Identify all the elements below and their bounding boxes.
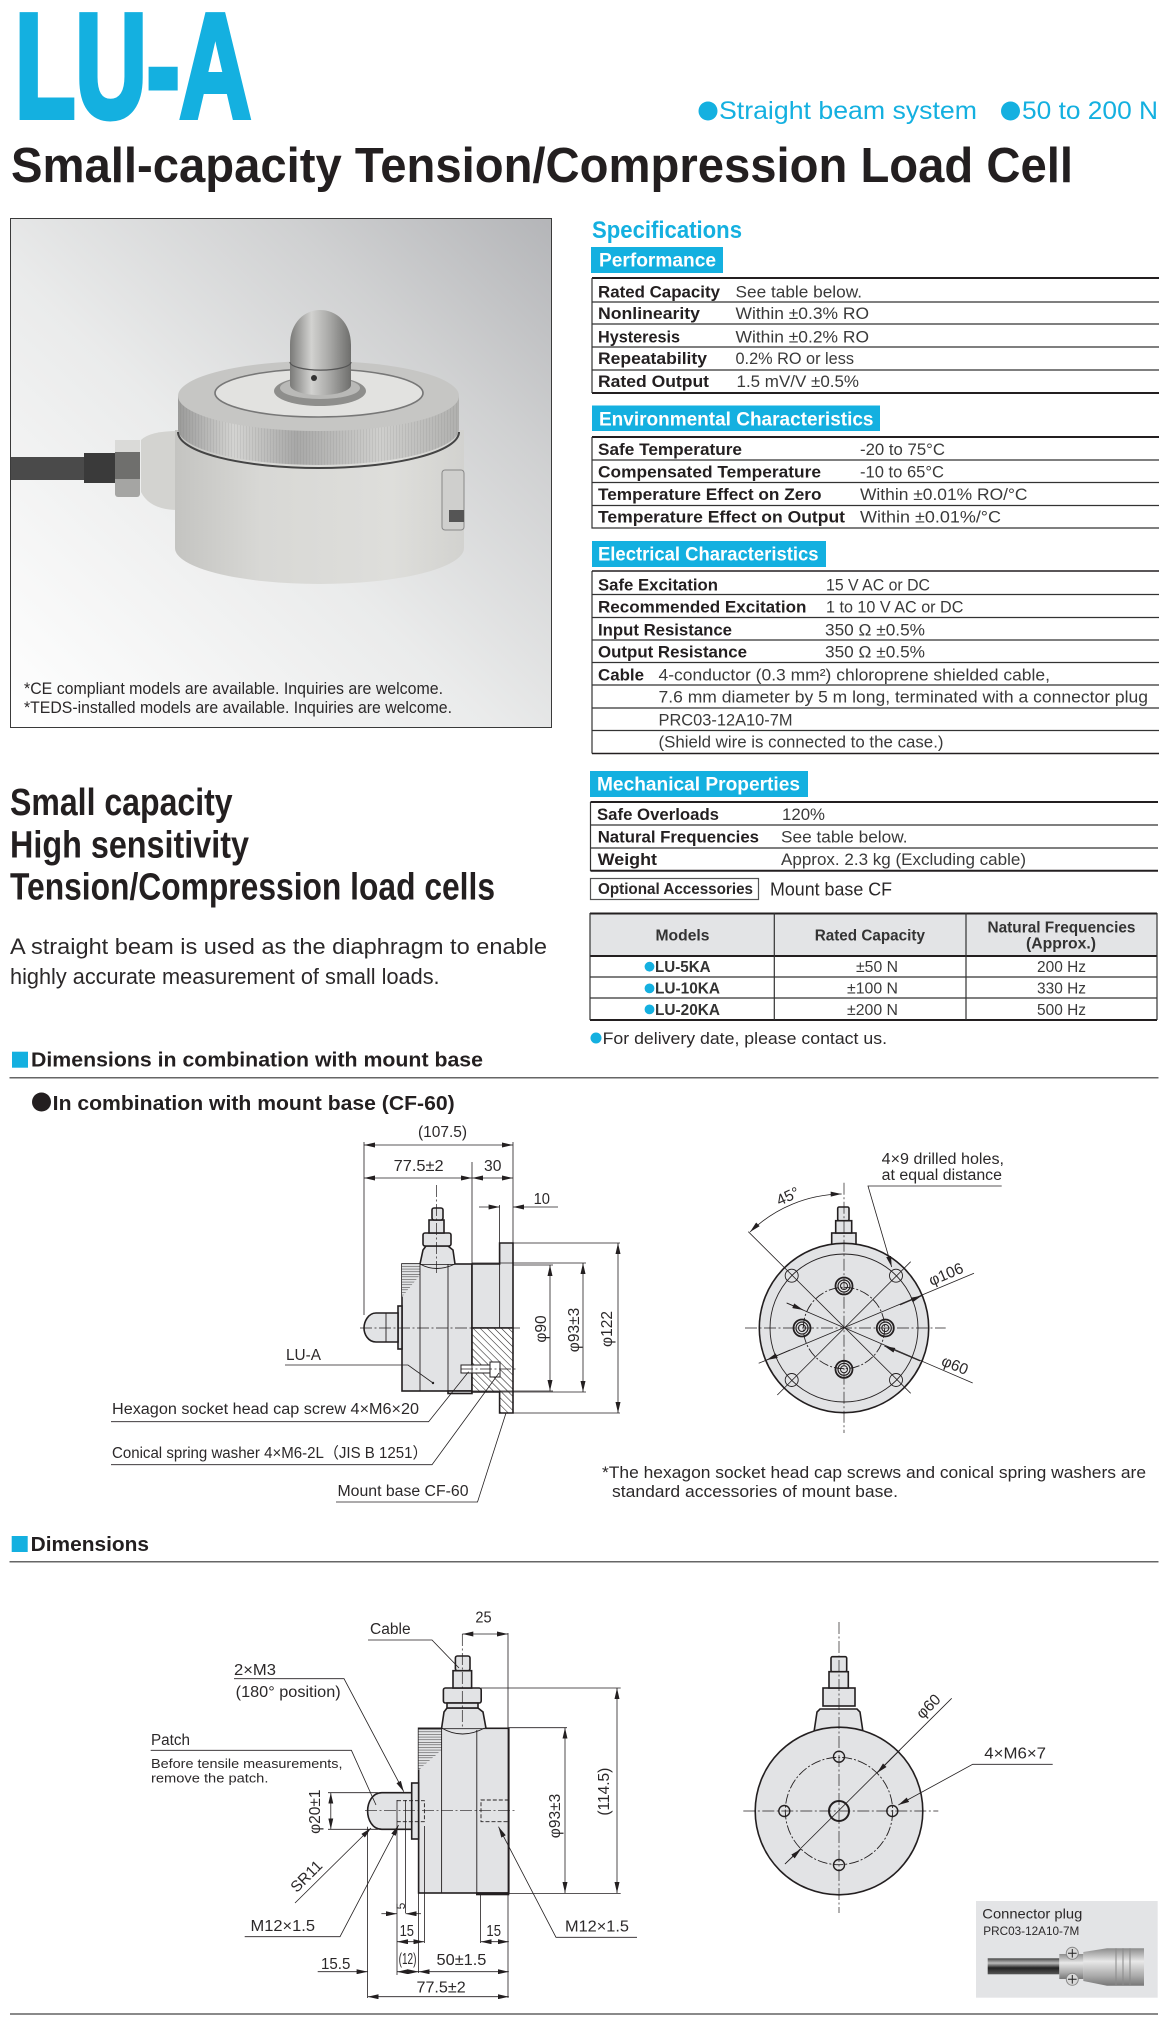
label: 2xM3: 2×M3 xyxy=(234,1662,276,1679)
dimension: diameter 60: φ60 xyxy=(939,1353,971,1379)
panel: electrical characteristics: PRC03-12A10-7M xyxy=(658,710,792,730)
section heading: dimensions with mount base xyxy=(10,1050,1158,1078)
label: cable: Cable xyxy=(370,1621,411,1638)
panel: connector plug: Connector plug xyxy=(982,1905,1082,1921)
dimension: 25 xyxy=(462,1610,508,1634)
label: patch: remove the patch. xyxy=(151,1771,268,1786)
dimension: diameter 106: φ106 xyxy=(926,1260,966,1290)
dimension: 12 xyxy=(397,1951,419,1972)
panel: performance: Within ±0.2% RO xyxy=(736,328,869,346)
panel: mechanical properties: See table below. xyxy=(781,828,908,847)
dimension: 50 xyxy=(419,1952,509,1972)
label: M12 right: M12×1.5 xyxy=(565,1919,629,1936)
panel: electrical characteristics: 1 to 10 V AC or DC xyxy=(826,597,963,616)
dimension: 50: 50±1.5 xyxy=(436,1952,486,1969)
headline text block: Tension/Compression load cells xyxy=(10,866,495,908)
label: mount base: Mount base CF-60 xyxy=(338,1483,469,1500)
photo notes: *CE compliant models are available. Inquiries are welcome. xyxy=(24,680,443,698)
panel: electrical characteristics: Cable xyxy=(598,666,644,685)
subtitle: Small-capacity Tension/Compression Load Cell xyxy=(11,139,1073,193)
label: hexagon screw xyxy=(111,1372,469,1422)
table header: (Approx.) xyxy=(1026,936,1096,953)
dimension: 30 xyxy=(472,1158,513,1178)
table rows: 200 Hz xyxy=(1037,959,1086,976)
bolts xyxy=(794,1278,894,1378)
dimension: 114.5: (114.5) xyxy=(596,1768,613,1816)
dimension: 5: 5 xyxy=(394,1902,408,1909)
panel: environmental characteristics: Environmental Characteristics xyxy=(599,410,874,430)
sub-heading: CF-60 combination: In combination with mount base (CF-60) xyxy=(53,1093,455,1115)
label: 2xM3 xyxy=(234,1662,404,1792)
headline text block: High sensitivity xyxy=(10,824,249,866)
dimension: 25: 25 xyxy=(475,1610,492,1627)
dimension: 10: 10 xyxy=(534,1191,550,1208)
panel: performance: 1.5 mV/V ±0.5% xyxy=(736,372,859,391)
table rows: 500 Hz xyxy=(1037,1002,1086,1019)
label: LU-A: LU-A xyxy=(286,1347,322,1364)
label: mount base xyxy=(336,1413,506,1502)
label: patch: Before tensile measurements, xyxy=(151,1756,342,1771)
label: conical spring washer xyxy=(111,1373,499,1465)
panel: performance: See table below. xyxy=(736,282,862,302)
mount base section xyxy=(461,1243,517,1413)
table rows: LU-20KA xyxy=(655,1002,720,1019)
label: 2xM3: (180° position) xyxy=(236,1684,341,1701)
extension lines xyxy=(328,1633,621,1998)
dimension: diameter 90 xyxy=(533,1265,550,1391)
heading: Specifications: Specifications xyxy=(592,217,742,244)
label: cable xyxy=(368,1621,459,1668)
hidden threads xyxy=(397,1800,509,1822)
feature tags xyxy=(698,97,1158,125)
photo notes xyxy=(24,680,452,717)
dimension: 15 left: 15 xyxy=(400,1923,414,1940)
panel: electrical characteristics: 15 V AC or DC xyxy=(826,576,930,594)
headline text block xyxy=(10,782,495,908)
table rows xyxy=(645,959,1086,1019)
feature tags: Straight beam system xyxy=(719,97,977,125)
table: models xyxy=(590,913,1157,1020)
panel: electrical characteristics: Electrical Characteristics xyxy=(598,545,818,566)
panel: performance: 0.2% RO or less xyxy=(736,349,854,368)
panel: performance: Repeatability xyxy=(598,349,708,368)
label: M12 left xyxy=(245,1825,399,1937)
panel: environmental characteristics: Temperature Effect on Output xyxy=(598,508,845,526)
dimension: 77.5: 77.5±2 xyxy=(394,1158,444,1175)
dimension: diameter 90: φ90 xyxy=(533,1315,550,1343)
dimension: diameter 93: φ93±3 xyxy=(566,1308,583,1352)
dimension: 15 right: 15 xyxy=(486,1923,501,1940)
dimension: 77.5 xyxy=(364,1158,472,1178)
panel: electrical characteristics: Input Resistance xyxy=(598,621,732,640)
dimension: 15 left xyxy=(397,1923,424,1942)
panel: environmental characteristics: -20 to 75°C xyxy=(860,440,945,459)
panel: mechanical properties: Safe Overloads xyxy=(597,805,719,824)
drawing: end view dimensions xyxy=(743,1622,1053,1913)
panel: electrical characteristics: Safe Excitation xyxy=(598,576,718,594)
dimension: diameter 60: φ60 xyxy=(913,1691,945,1722)
dimension: 45 degrees: 45° xyxy=(774,1184,802,1210)
panel: environmental characteristics: Compensated Temperature xyxy=(598,462,821,482)
drawing: side view dimensions xyxy=(151,1610,637,1998)
body outline xyxy=(755,1657,923,1895)
panel: mechanical properties: Natural Frequencies xyxy=(598,828,759,847)
table rows: ±100 N xyxy=(847,981,898,998)
body outline xyxy=(368,1656,509,1894)
panel: performance: Within ±0.3% RO xyxy=(736,304,869,323)
feature tags: 50 to 200 N xyxy=(1022,97,1158,125)
dimension: 77.5: 77.5±2 xyxy=(416,1980,466,1997)
dimension: diameter 122: φ122 xyxy=(599,1311,616,1347)
table rows: LU-5KA xyxy=(655,959,711,976)
panel: environmental characteristics: -10 to 65°C xyxy=(860,462,944,482)
table header: Rated Capacity xyxy=(815,928,925,945)
label: M12 left: M12×1.5 xyxy=(250,1918,315,1935)
extension lines xyxy=(364,1142,620,1413)
table rows: LU-10KA xyxy=(655,981,720,998)
table rows: 330 Hz xyxy=(1037,981,1086,998)
label: drilled holes: at equal distance xyxy=(882,1167,1002,1184)
optional accessories xyxy=(590,878,892,900)
section heading: dimensions: Dimensions xyxy=(31,1534,149,1556)
panel: performance: Rated Output xyxy=(598,372,709,391)
panel: environmental characteristics: Within ±0.01% RO/°C xyxy=(860,485,1028,504)
label: 4xM6x7: 4×M6×7 xyxy=(984,1745,1046,1762)
label: hexagon screw: Hexagon socket head cap screw 4×M6×20 xyxy=(112,1401,419,1418)
dimension: 10 xyxy=(479,1191,558,1208)
panel: performance: Nonlinearity xyxy=(598,304,701,323)
panel: product photo xyxy=(10,218,552,728)
panel: performance xyxy=(591,247,1159,393)
panel: environmental characteristics: Safe Temperature xyxy=(598,440,742,459)
panel: electrical characteristics: Output Resistance xyxy=(598,642,747,662)
label: LU-A xyxy=(285,1347,434,1384)
dimension: diameter 60 xyxy=(785,1691,952,1864)
table rows: ±50 N xyxy=(856,959,898,976)
panel: mechanical properties: Weight xyxy=(598,850,657,869)
drawing: end view with mount base xyxy=(745,1151,1004,1433)
table header xyxy=(656,920,1136,953)
optional accessories: Mount base CF xyxy=(770,880,892,900)
panel: performance: Rated Capacity xyxy=(598,282,721,302)
panel: mechanical properties: 120% xyxy=(782,805,825,824)
description text: A straight beam is used as the diaphragm to enable xyxy=(10,934,547,959)
note: accessories xyxy=(602,1463,1146,1501)
dimension: 45 degrees xyxy=(750,1184,842,1232)
label: SR11 xyxy=(288,1828,371,1903)
label: patch xyxy=(151,1732,376,1805)
label: drilled holes xyxy=(868,1151,1004,1267)
photo notes: *TEDS-installed models are available. Inquiries are welcome. xyxy=(24,699,452,717)
panel: electrical characteristics: 4-conductor (0.3 mm²) chloroprene shielded cable, xyxy=(658,666,1050,685)
dimension: 5 xyxy=(381,1902,421,1914)
panel: electrical characteristics: 350 Ω ±0.5% xyxy=(825,642,925,662)
photo: load cell xyxy=(11,310,464,584)
dimension: 12: (12) xyxy=(399,1951,416,1968)
panel: electrical characteristics xyxy=(592,541,1159,754)
description text: highly accurate measurement of small loads. xyxy=(10,964,440,989)
label: M12 right xyxy=(498,1827,637,1937)
description text xyxy=(10,934,547,989)
panel: performance: Performance xyxy=(599,250,716,272)
panel: connector plug: PRC03-12A10-7M xyxy=(983,1926,1079,1938)
label: drilled holes: 4×9 drilled holes, xyxy=(882,1151,1004,1168)
dimension: 15.5: 15.5 xyxy=(321,1956,350,1973)
dimension: diameter 60 xyxy=(787,1303,973,1383)
panel: mechanical properties: Mechanical Properties xyxy=(597,775,800,796)
note: accessories: *The hexagon socket head cap screws and conical spring washers are xyxy=(602,1463,1146,1482)
section heading: dimensions with mount base: Dimensions in combination with mount base xyxy=(31,1050,483,1072)
panel: electrical characteristics: 350 Ω ±0.5% xyxy=(825,621,925,640)
delivery note: For delivery date, please contact us. xyxy=(603,1029,887,1048)
dimension: 15.5 xyxy=(318,1956,368,1973)
panel: electrical characteristics: 7.6 mm diameter by 5 m long, terminated with a connector plug xyxy=(658,688,1148,706)
panel: mechanical properties: Approx. 2.3 kg (Excluding cable) xyxy=(781,850,1026,869)
panel: electrical characteristics: (Shield wire is connected to the case.) xyxy=(658,732,944,751)
disc body xyxy=(759,1207,929,1413)
panel: performance: Hysteresis xyxy=(598,328,680,346)
icon: connector plug xyxy=(988,1947,1144,1986)
label: patch: Patch xyxy=(151,1732,190,1749)
panel: electrical characteristics: Recommended Excitation xyxy=(598,597,806,616)
dimension: 15 right xyxy=(481,1923,509,1942)
optional accessories: Optional Accessories xyxy=(598,881,753,898)
label: 4xM6x7 xyxy=(898,1745,1053,1805)
panel: environmental characteristics: Temperature Effect on Zero xyxy=(598,485,822,504)
holes xyxy=(779,1751,898,1870)
panel: environmental characteristics xyxy=(592,406,1159,528)
panel: mechanical properties xyxy=(590,771,1158,871)
label: SR11: SR11 xyxy=(288,1858,326,1896)
panel: environmental characteristics: Within ±0.01%/°C xyxy=(860,508,1001,526)
dimension: diameter 93 xyxy=(566,1263,583,1392)
table rows: ±200 N xyxy=(847,1002,898,1019)
dimension: diameter 20: φ20±1 xyxy=(307,1789,324,1834)
table header: Models xyxy=(656,928,710,945)
headline text block: Small capacity xyxy=(10,782,233,824)
table header: Natural Frequencies xyxy=(988,920,1136,937)
section heading: dimensions xyxy=(10,1534,1158,1562)
load cell body xyxy=(364,1208,472,1394)
label: conical spring washer: Conical spring washer 4×M6-2L（JIS B 1251） xyxy=(112,1445,428,1462)
dimension: diameter 93: φ93±3 xyxy=(547,1794,564,1838)
drilled holes xyxy=(785,1269,902,1386)
panel: connector plug xyxy=(976,1901,1158,1998)
dimension: 30: 30 xyxy=(484,1158,502,1175)
drawing: side view with mount base xyxy=(111,1124,620,1502)
dimension: diameter 106 xyxy=(759,1260,974,1363)
dimension: 107.5: (107.5) xyxy=(418,1124,467,1141)
note: accessories: standard accessories of mount base. xyxy=(612,1482,898,1501)
